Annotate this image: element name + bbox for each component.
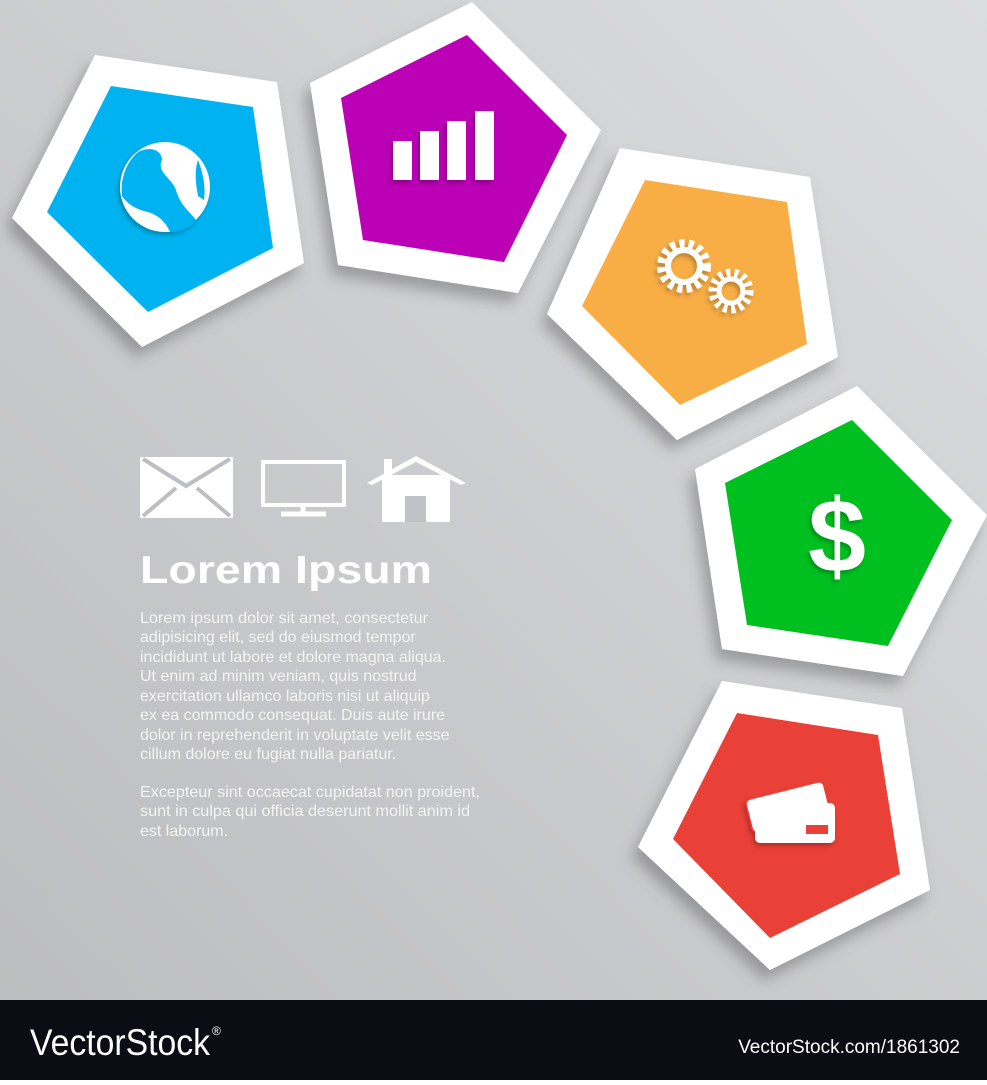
text block: body: incididunt ut labore et dolore magna aliqua. — [140, 649, 446, 666]
icon: envelope — [140, 457, 233, 518]
text block: body: est laborum. — [140, 823, 228, 840]
text block: body: dolor in reprehenderit in voluptate velit esse — [140, 727, 450, 744]
footer: VectorStock.com/1861302 — [738, 1037, 960, 1058]
text block: body: Excepteur sint occaecat cupidatat non proident, — [140, 784, 480, 801]
icon: house — [367, 456, 466, 522]
panel: blue pentagon — [12, 55, 304, 347]
icon: dollar: $ — [808, 479, 866, 595]
text block: body: ex ea commodo consequat. Duis aute irure — [140, 707, 445, 724]
icon: gears — [662, 244, 749, 309]
text block: body: cillum dolore eu fugiat nulla pariatur. — [140, 746, 396, 763]
title: Lorem Ipsum — [140, 549, 432, 592]
panel: green pentagon — [695, 386, 987, 676]
footer: ® — [212, 1024, 221, 1038]
text block: body: Ut enim ad minim veniam, quis nostrud — [140, 668, 417, 685]
panel: red pentagon — [638, 681, 930, 970]
text block: body: Lorem ipsum dolor sit amet, consectetur — [140, 610, 429, 627]
footer — [0, 1000, 987, 1080]
text block: body: exercitation ullamco laboris nisi ut aliquip — [140, 688, 430, 705]
text block: body: adipisicing elit, sed do eiusmod tempor — [140, 629, 416, 646]
text block: body — [140, 610, 480, 840]
panel: orange pentagon — [547, 148, 838, 440]
icon: monitor — [263, 462, 344, 514]
panel: purple pentagon — [310, 2, 601, 293]
icon: bar chart — [393, 111, 494, 180]
footer: VectorStock — [30, 1022, 210, 1063]
icon: credit cards — [745, 781, 835, 843]
icon: globe — [120, 142, 210, 232]
text block: body: sunt in culpa qui officia deserunt mollit anim id — [140, 803, 470, 820]
